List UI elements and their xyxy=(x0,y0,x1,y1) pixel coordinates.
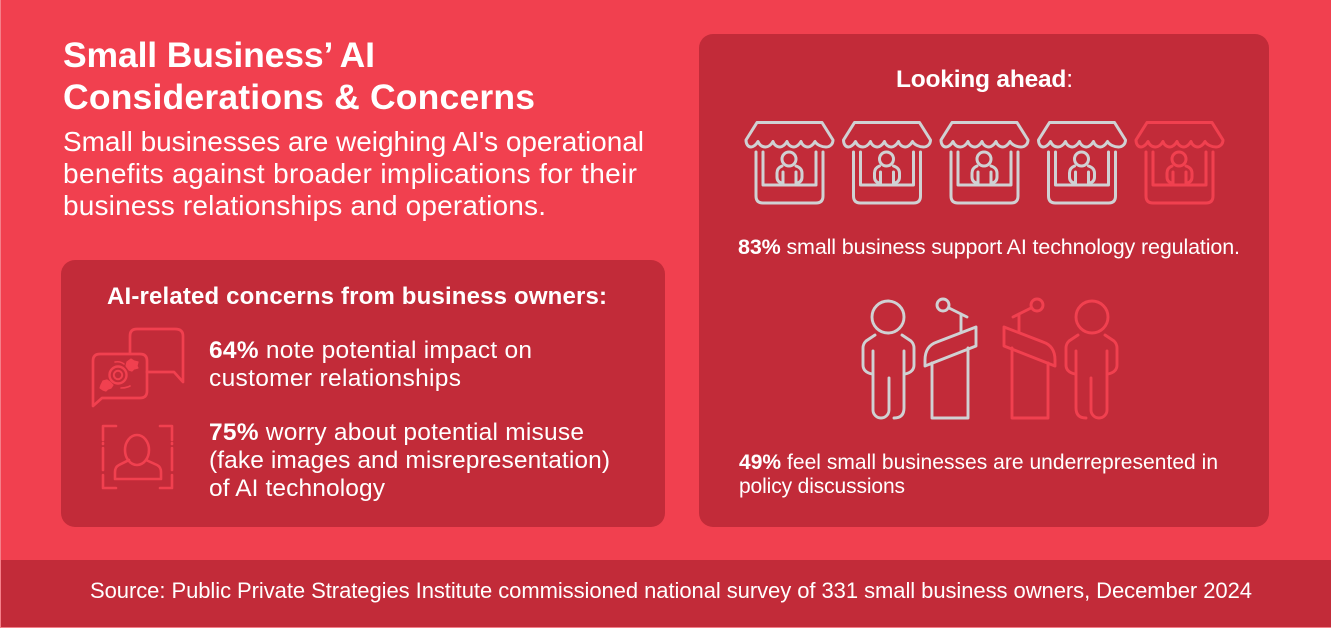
source text: Source: Public Private Strategies Institute commissioned national survey of 331 small business owners, December 2024 xyxy=(90,578,1252,603)
stat: 75% xyxy=(209,419,610,502)
looking ahead heading: Looking ahead: xyxy=(896,66,1073,93)
intro text: Small businesses are weighing AI's operational xyxy=(63,126,644,157)
stat: 64%: customer relationships xyxy=(209,365,461,392)
stat: 64%: 64% note potential impact on xyxy=(209,337,532,364)
title xyxy=(63,35,535,117)
icon: face scan xyxy=(103,426,172,488)
icon: person at podium, mirrored xyxy=(1004,299,1117,418)
stat: 83%: 83% small business support AI technology regulation. xyxy=(738,235,1240,259)
stat: 49%: 49% feel small businesses are underrepresented in xyxy=(739,451,1218,474)
intro text: business relationships and operations. xyxy=(63,190,546,221)
stat: 64% xyxy=(209,337,532,392)
icon: chat bubbles xyxy=(93,329,183,406)
stat: 75%: (fake images and misrepresentation) xyxy=(209,447,610,474)
intro text xyxy=(63,126,644,221)
stat: 75%: 75% worry about potential misuse xyxy=(209,419,584,446)
icon: person at podium, light xyxy=(863,299,976,418)
panel: concerns xyxy=(61,260,665,527)
source band xyxy=(0,560,1331,628)
intro text: benefits against broader implications for their xyxy=(63,158,637,189)
stat: 49% xyxy=(739,451,1218,498)
panel: looking ahead xyxy=(699,34,1269,527)
icons: five stalls, four of five filled xyxy=(746,122,1223,203)
title: Considerations & Concerns xyxy=(63,77,535,117)
concerns heading: AI-related concerns from business owners: xyxy=(107,283,607,310)
stat: 49%: policy discussions xyxy=(739,475,905,498)
title: Small Business’ AI xyxy=(63,35,375,75)
stat: 75%: of AI technology xyxy=(209,475,386,502)
